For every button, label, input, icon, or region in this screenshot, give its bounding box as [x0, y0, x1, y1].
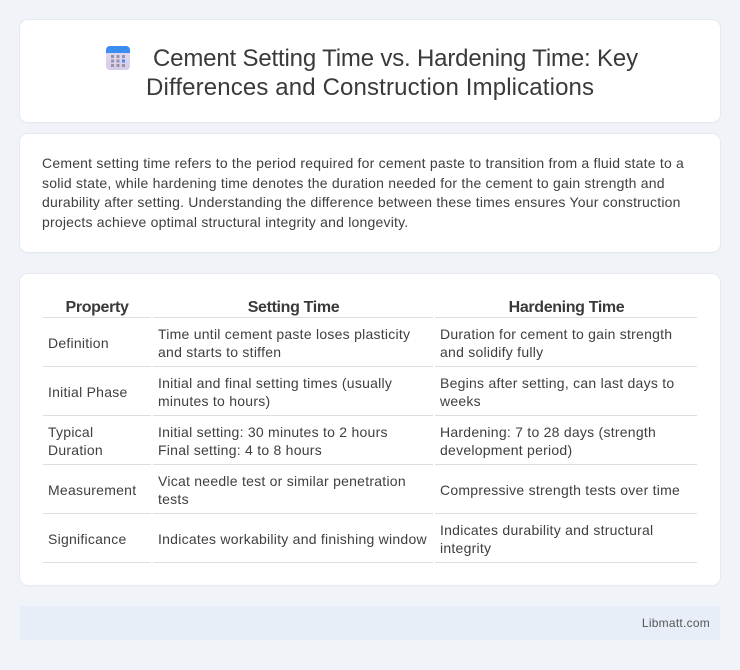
row: definition: Duration for cement to gain strength: [440, 326, 672, 342]
row: significance: integrity: [440, 540, 491, 556]
title: [146, 45, 638, 101]
row: initial phase: weeks: [440, 393, 481, 409]
row: significance: Significance: [48, 531, 126, 547]
row: significance: Indicates workability and finishing window: [158, 531, 427, 547]
row: typical duration: Initial setting: 30 minutes to 2 hours: [158, 424, 388, 440]
row: measurement: [48, 473, 680, 507]
row: definition: [48, 326, 672, 360]
panel: intro text: projects achieve optimal structural integrity and longevity.: [42, 214, 408, 230]
panel: intro text: [20, 134, 720, 252]
row: initial phase: Initial Phase: [48, 384, 128, 400]
row: measurement: Measurement: [48, 482, 136, 498]
row: significance: Indicates durability and structural: [440, 522, 653, 538]
row: typical duration: Hardening: 7 to 28 days (strength: [440, 424, 656, 440]
panel: intro text: solid state, while hardening time denotes the duration needed for the cement to gain strength and: [42, 175, 665, 191]
row: initial phase: [48, 375, 674, 409]
title: Cement Setting Time vs. Hardening Time: Key: [153, 45, 638, 72]
row: initial phase: minutes to hours): [158, 393, 270, 409]
row: typical duration: Final setting: 4 to 8 hours: [158, 442, 322, 458]
footer text: Libmatt.com: [642, 616, 710, 630]
row: definition: and starts to stiffen: [158, 344, 281, 360]
panel: intro text: Cement setting time refers to the period required for cement paste to transition from a fluid state to a: [42, 155, 684, 171]
footer bar: [20, 606, 720, 640]
row: initial phase: Begins after setting, can last days to: [440, 375, 674, 391]
row: measurement: tests: [158, 491, 189, 507]
table header: setting time: Setting Time: [248, 299, 339, 316]
row: typical duration: development period): [440, 442, 572, 458]
row: definition: and solidify fully: [440, 344, 543, 360]
icon: calendar: [106, 46, 130, 70]
row: typical duration: [48, 424, 656, 458]
title: Differences and Construction Implications: [146, 74, 594, 101]
row: definition: Time until cement paste loses plasticity: [158, 326, 410, 342]
table header: property: Property: [66, 299, 128, 316]
panel: comparison table: [20, 274, 720, 585]
row: significance: [48, 522, 653, 556]
row: definition: Definition: [48, 335, 109, 351]
panel: header: [20, 20, 720, 122]
row: measurement: Compressive strength tests over time: [440, 482, 680, 498]
row: typical duration: Duration: [48, 442, 103, 458]
row: typical duration: Typical: [48, 424, 93, 440]
table header: hardening time: Hardening Time: [509, 299, 624, 316]
row: initial phase: Initial and final setting times (usually: [158, 375, 392, 391]
panel: intro text: durability after setting. Understanding the difference between these times ensures Your construction: [42, 194, 681, 210]
row: measurement: Vicat needle test or similar penetration: [158, 473, 406, 489]
